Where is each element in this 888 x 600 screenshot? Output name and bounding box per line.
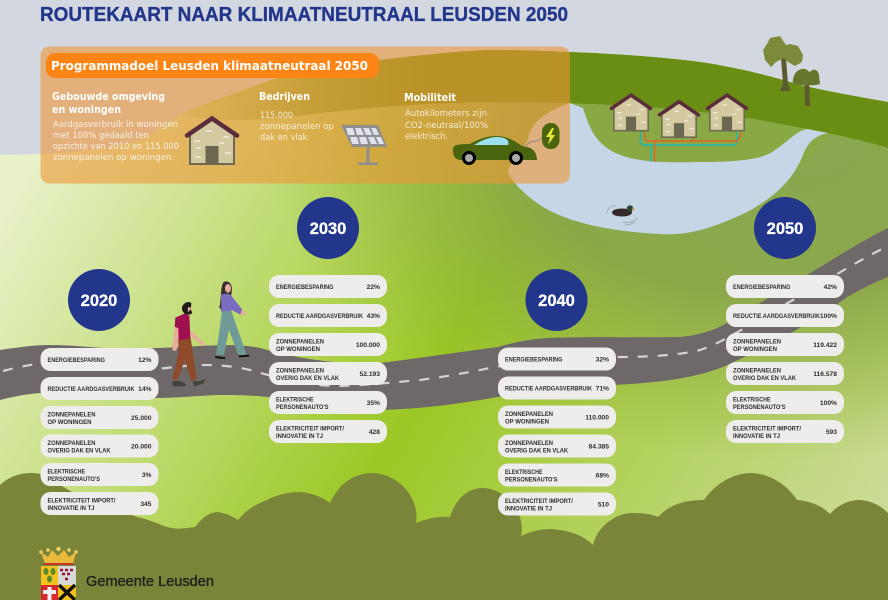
card: elektriciteit 2030: 428 bbox=[369, 429, 380, 436]
woman bbox=[215, 281, 249, 359]
card: zonnepanelen overig 2030: OVERIG DAK EN VLAK bbox=[276, 375, 339, 382]
card: elektriciteit 2040: ELEKTRICITEIT IMPORT/ bbox=[505, 498, 573, 505]
year badge 2030: 2030 bbox=[310, 220, 346, 238]
pipes bbox=[640, 131, 741, 162]
lake bbox=[508, 103, 828, 234]
text block: gebouwde omgeving: zonnepanelen op woningen. bbox=[53, 153, 174, 163]
man bbox=[172, 302, 206, 387]
card: reductie aardgasverbruik 2030: 43% bbox=[367, 313, 380, 320]
card: zonnepanelen overig 2020: 20.000 bbox=[131, 444, 152, 450]
tree small bbox=[793, 69, 820, 106]
card: elektriciteit 2050: INNOVATIE IN TJ bbox=[733, 433, 780, 440]
hill: dark green bbox=[180, 50, 888, 148]
card: elektrische personenauto's 2020: ELEKTRISCHE bbox=[48, 468, 86, 475]
card: energiebesparing 2040 bbox=[498, 348, 616, 370]
icon: house bbox=[187, 118, 237, 164]
card: elektriciteit 2020: INNOVATIE IN TJ bbox=[48, 505, 95, 512]
card: elektriciteit 2050 bbox=[726, 420, 844, 443]
title: ROUTEKAART NAAR KLIMAATNEUTRAAL LEUSDEN 2050 bbox=[40, 3, 568, 26]
card: elektriciteit 2040 bbox=[498, 492, 616, 516]
card: zonnepanelen overig 2030 bbox=[269, 362, 387, 385]
text block: mobiliteit bbox=[404, 92, 488, 142]
text block: gebouwde omgeving: opzichte van 2010 en 115.000 bbox=[53, 142, 179, 152]
card: zonnepanelen overig 2040: OVERIG DAK EN VLAK bbox=[505, 448, 568, 454]
text block: mobiliteit: Mobiliteit bbox=[404, 92, 456, 104]
house 1 bbox=[612, 95, 650, 131]
year badge 2020 bbox=[68, 269, 130, 331]
card: elektrische personenauto's 2030: ELEKTRISCHE bbox=[276, 396, 314, 403]
text block: bedrijven bbox=[259, 91, 334, 143]
year badge 2050 bbox=[754, 197, 816, 259]
text block: mobiliteit: CO2-neutraal/100% bbox=[405, 121, 488, 131]
logo: coat of arms bbox=[39, 547, 78, 600]
year badge 2040 bbox=[526, 269, 588, 331]
card: elektriciteit 2020 bbox=[40, 492, 158, 515]
text block: bedrijven: 115.000 bbox=[260, 111, 293, 121]
card: zonnepanelen op woningen 2030: OP WONINGEN bbox=[276, 346, 320, 353]
card: zonnepanelen op woningen 2020: OP WONINGEN bbox=[48, 419, 92, 426]
panel: programmadoel bbox=[40, 46, 570, 184]
card: zonnepanelen op woningen 2020 bbox=[40, 406, 158, 429]
icon: duck bbox=[607, 205, 637, 225]
card: reductie aardgasverbruik 2030: REDUCTIE AARDGASVERBRUIK bbox=[276, 313, 363, 320]
card: zonnepanelen overig 2040: ZONNEPANELEN bbox=[505, 440, 553, 447]
road bbox=[0, 228, 888, 410]
card: energiebesparing 2030 bbox=[269, 275, 387, 298]
card: elektrische personenauto's 2020: 3% bbox=[142, 472, 152, 479]
card: zonnepanelen overig 2050: ZONNEPANELEN bbox=[733, 367, 781, 374]
programme goal pill bbox=[46, 53, 379, 78]
card: elektrische personenauto's 2030: 35% bbox=[367, 400, 380, 407]
text block: bedrijven: Bedrijven bbox=[259, 91, 310, 103]
card: reductie aardgasverbruik 2050 bbox=[726, 304, 844, 327]
card: elektrische personenauto's 2020 bbox=[40, 463, 158, 486]
card: elektrische personenauto's 2040: 68% bbox=[596, 472, 609, 480]
logo: gemeente leusden: Gemeente Leusden bbox=[86, 574, 214, 590]
card: elektrische personenauto's 2040 bbox=[498, 464, 616, 486]
year badge 2020: 2020 bbox=[81, 292, 117, 310]
hill: island behind houses bbox=[585, 104, 828, 170]
card: reductie aardgasverbruik 2040: REDUCTIE AARDGASVERBRUIK bbox=[505, 385, 592, 392]
cards 2030 bbox=[269, 275, 387, 443]
card: reductie aardgasverbruik 2040 bbox=[498, 376, 616, 400]
cards 2020 bbox=[40, 348, 158, 515]
card: zonnepanelen op woningen 2040: ZONNEPANELEN bbox=[505, 411, 553, 418]
text block: bedrijven: dak en vlak. bbox=[260, 133, 310, 143]
card: elektriciteit 2050: ELEKTRICITEIT IMPORT/ bbox=[733, 425, 801, 432]
year badge 2030 bbox=[297, 197, 359, 259]
card: zonnepanelen op woningen 2020: ZONNEPANELEN bbox=[48, 411, 96, 418]
year badge 2040: 2040 bbox=[538, 292, 575, 310]
card: reductie aardgasverbruik 2040: 71% bbox=[596, 385, 609, 392]
card: energiebesparing 2020: ENERGIEBESPARING bbox=[48, 357, 105, 364]
card: zonnepanelen overig 2050 bbox=[726, 362, 844, 385]
card: elektrische personenauto's 2040: ELEKTRISCHE bbox=[505, 469, 543, 476]
card: zonnepanelen overig 2020: ZONNEPANELEN bbox=[48, 440, 96, 447]
card: zonnepanelen overig 2040 bbox=[498, 434, 616, 458]
card: reductie aardgasverbruik 2020: REDUCTIE AARDGASVERBRUIK bbox=[48, 386, 135, 393]
card: energiebesparing 2040: ENERGIEBESPARING bbox=[505, 356, 563, 363]
card: zonnepanelen op woningen 2040 bbox=[498, 406, 616, 428]
card: elektrische personenauto's 2050: 100% bbox=[820, 400, 837, 407]
card: zonnepanelen op woningen 2030 bbox=[269, 333, 387, 356]
card: elektrische personenauto's 2030 bbox=[269, 391, 387, 414]
text block: gebouwde omgeving: Aardgasverbruik in woningen bbox=[53, 120, 178, 130]
houses by the lake bbox=[612, 95, 746, 162]
card: elektrische personenauto's 2050 bbox=[726, 391, 844, 414]
card: elektrische personenauto's 2030: PERSONENAUTO'S bbox=[276, 404, 329, 411]
tree large bbox=[763, 36, 803, 91]
icon: electric car bbox=[453, 123, 560, 165]
card: zonnepanelen op woningen 2040: 110.000 bbox=[585, 414, 609, 422]
card: elektriciteit 2040: 510 bbox=[598, 502, 609, 508]
text block: gebouwde omgeving: Gebouwde omgeving bbox=[52, 91, 165, 103]
card: energiebesparing 2030: 22% bbox=[367, 284, 380, 291]
card: elektrische personenauto's 2020: PERSONENAUTO'S bbox=[48, 476, 101, 483]
card: zonnepanelen overig 2050: OVERIG DAK EN VLAK bbox=[733, 375, 796, 382]
house 3 bbox=[708, 95, 746, 131]
card: zonnepanelen op woningen 2050 bbox=[726, 333, 844, 356]
card: reductie aardgasverbruik 2050: REDUCTIE AARDGASVERBRUIK bbox=[733, 313, 820, 320]
card: reductie aardgasverbruik 2020 bbox=[40, 377, 158, 400]
card: elektrische personenauto's 2050: PERSONENAUTO'S bbox=[733, 404, 786, 411]
bushes foreground bbox=[0, 473, 888, 600]
card: energiebesparing 2050 bbox=[726, 275, 844, 298]
card: zonnepanelen op woningen 2030: ZONNEPANELEN bbox=[276, 338, 324, 345]
card: reductie aardgasverbruik 2020: 14% bbox=[138, 386, 152, 393]
card: energiebesparing 2040: 32% bbox=[596, 356, 609, 363]
card: elektriciteit 2050: 593 bbox=[826, 429, 837, 436]
card: zonnepanelen op woningen 2050: 119.422 bbox=[813, 342, 837, 349]
card: zonnepanelen overig 2040: 84.385 bbox=[589, 444, 609, 450]
card: elektriciteit 2030 bbox=[269, 420, 387, 443]
card: elektriciteit 2040: INNOVATIE IN TJ bbox=[505, 506, 552, 512]
people walking bbox=[172, 281, 249, 387]
card: elektriciteit 2020: ELEKTRICITEIT IMPORT/ bbox=[48, 497, 116, 504]
card: zonnepanelen op woningen 2040: OP WONINGEN bbox=[505, 418, 549, 426]
card: energiebesparing 2020 bbox=[40, 348, 158, 371]
programme goal pill: Programmadoel Leusden klimaatneutraal 2050 bbox=[51, 58, 368, 73]
text block: mobiliteit: Autokilometers zijn bbox=[405, 109, 487, 119]
text block: mobiliteit: elektrisch. bbox=[405, 132, 448, 142]
card: energiebesparing 2050: 42% bbox=[824, 284, 837, 291]
year badge 2050: 2050 bbox=[767, 220, 803, 238]
card: zonnepanelen overig 2020 bbox=[40, 434, 158, 458]
road centre dashes bbox=[3, 246, 888, 386]
card: reductie aardgasverbruik 2030 bbox=[269, 304, 387, 327]
card: zonnepanelen overig 2020: OVERIG DAK EN VLAK bbox=[48, 448, 111, 454]
card: zonnepanelen overig 2050: 116.578 bbox=[813, 371, 837, 378]
cards 2040 bbox=[498, 348, 616, 516]
cards 2050 bbox=[726, 275, 844, 443]
text block: gebouwde omgeving: en woningen bbox=[52, 104, 121, 116]
card: zonnepanelen op woningen 2030: 100.000 bbox=[356, 342, 380, 349]
text block: gebouwde omgeving bbox=[52, 91, 179, 163]
card: reductie aardgasverbruik 2050: 100% bbox=[820, 313, 837, 320]
card: energiebesparing 2030: ENERGIEBESPARING bbox=[276, 284, 334, 291]
card: elektriciteit 2020: 345 bbox=[140, 501, 152, 508]
card: zonnepanelen overig 2030: ZONNEPANELEN bbox=[276, 367, 324, 374]
text block: gebouwde omgeving: met 100% gedaald ten bbox=[53, 131, 149, 141]
card: elektriciteit 2030: ELEKTRICITEIT IMPORT/ bbox=[276, 425, 344, 432]
card: elektrische personenauto's 2050: ELEKTRISCHE bbox=[733, 396, 771, 403]
house 2 bbox=[660, 102, 698, 137]
card: zonnepanelen op woningen 2020: 25.000 bbox=[131, 415, 152, 422]
icon: solar panel bbox=[341, 125, 387, 165]
card: zonnepanelen overig 2030: 52.193 bbox=[360, 371, 380, 378]
text block: bedrijven: zonnepanelen op bbox=[260, 122, 334, 132]
card: zonnepanelen op woningen 2050: OP WONINGEN bbox=[733, 346, 777, 353]
card: energiebesparing 2020: 12% bbox=[138, 357, 152, 364]
card: zonnepanelen op woningen 2050: ZONNEPANELEN bbox=[733, 338, 781, 345]
card: elektrische personenauto's 2040: PERSONENAUTO'S bbox=[505, 476, 558, 484]
card: energiebesparing 2050: ENERGIEBESPARING bbox=[733, 284, 791, 291]
card: elektriciteit 2030: INNOVATIE IN TJ bbox=[276, 433, 323, 440]
